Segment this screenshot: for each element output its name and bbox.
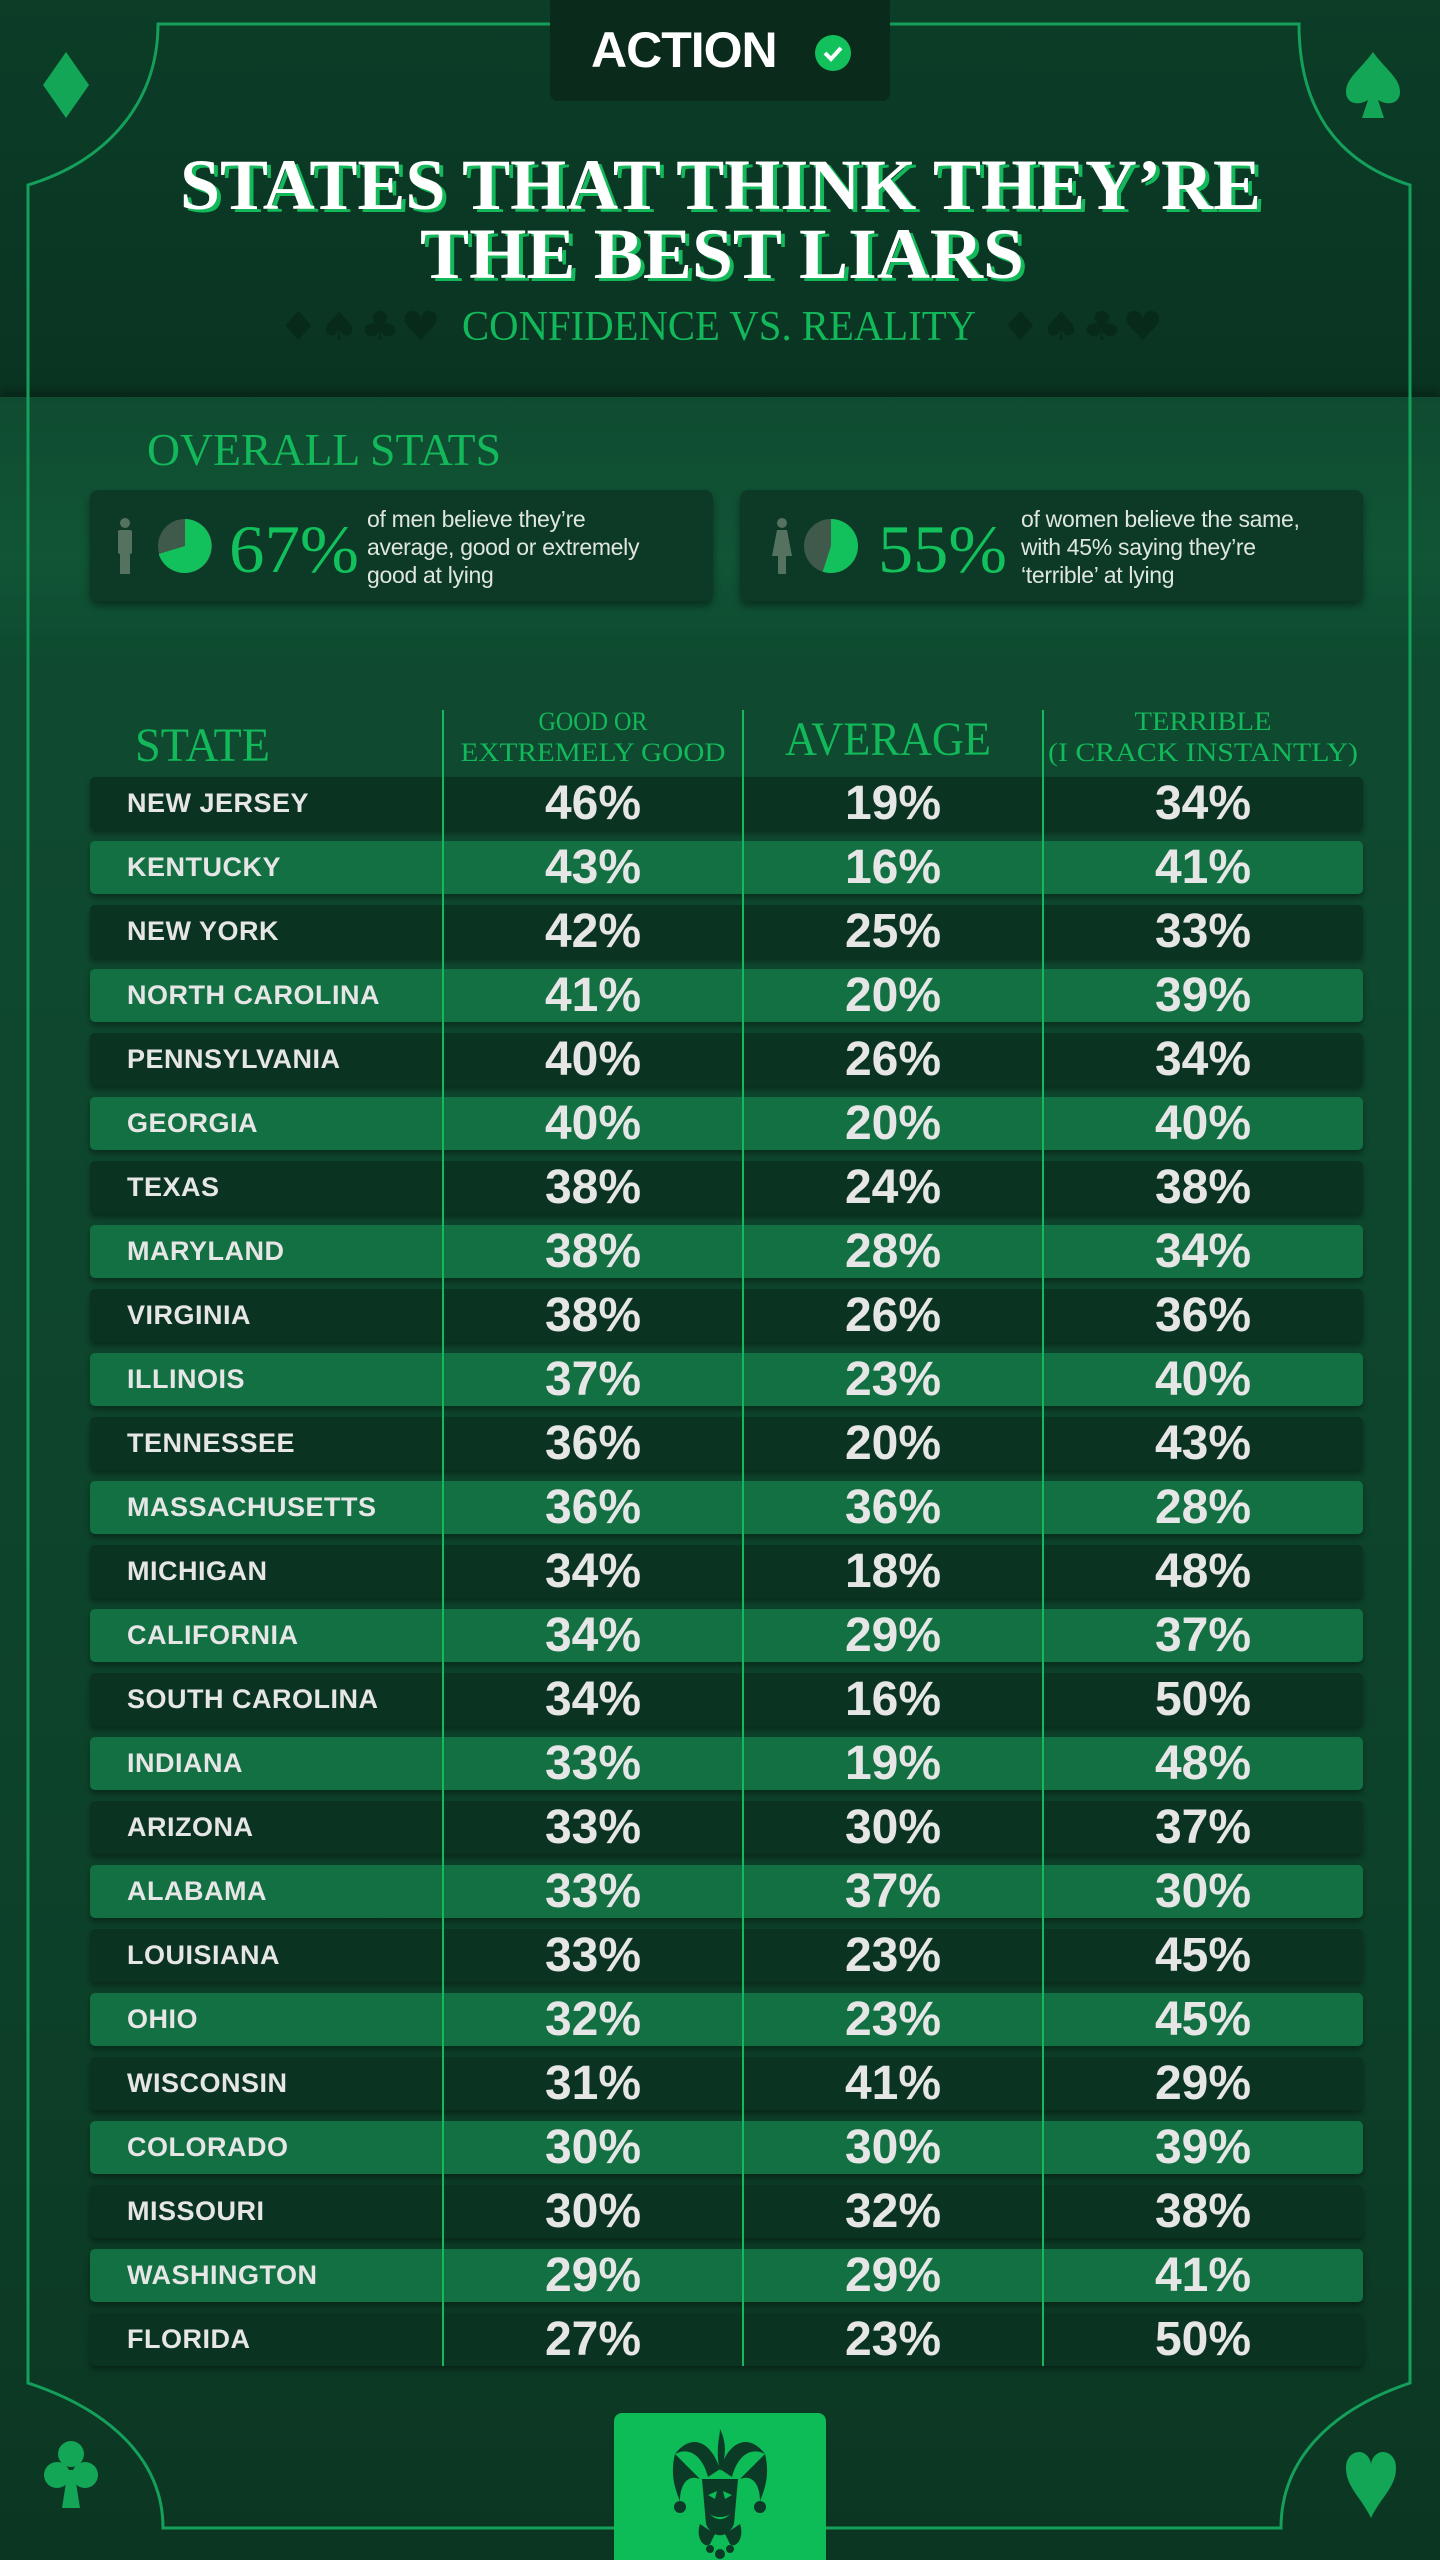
table: 23%: [845, 1993, 941, 2046]
table: SOUTH CAROLINA: [127, 1684, 378, 1714]
table: COLORADO: [127, 2132, 288, 2162]
table: 29%: [845, 2249, 941, 2302]
table: 41%: [1155, 841, 1251, 894]
table: 23%: [845, 1353, 941, 1406]
table: 38%: [545, 1225, 641, 1278]
table: 24%: [845, 1161, 941, 1214]
table: 31%: [545, 2057, 641, 2110]
table: 19%: [845, 1737, 941, 1790]
heading: overall stats: OVERALL STATS: [147, 424, 501, 475]
icon: man: [118, 518, 132, 574]
table: 40%: [545, 1033, 641, 1086]
table: 29%: [1155, 2057, 1251, 2110]
table: 29%: [845, 1609, 941, 1662]
card: men: average, good or extremely: [367, 534, 639, 560]
table: 33%: [545, 1865, 641, 1918]
icon: diamond: [43, 52, 89, 118]
table: 20%: [845, 969, 941, 1022]
card: women: [740, 490, 1363, 601]
table: 16%: [845, 1673, 941, 1726]
table: 34%: [545, 1545, 641, 1598]
table: ILLINOIS: [127, 1364, 245, 1394]
table: 29%: [545, 2249, 641, 2302]
table: 28%: [845, 1225, 941, 1278]
card: men: 67%: [229, 511, 359, 587]
table: 34%: [1155, 1225, 1251, 1278]
icon: spade: [1346, 52, 1400, 118]
table headers: GOOD OR: [538, 707, 648, 736]
table: 40%: [1155, 1353, 1251, 1406]
table: 43%: [1155, 1417, 1251, 1470]
title: STATES THAT THINK THEY’RE: [180, 145, 1261, 225]
table: 50%: [1155, 2313, 1251, 2366]
table: 20%: [845, 1097, 941, 1150]
table: 23%: [845, 1929, 941, 1982]
table: 33%: [545, 1737, 641, 1790]
table: INDIANA: [127, 1748, 243, 1778]
table: 30%: [1155, 1865, 1251, 1918]
icon: jester: [672, 2429, 768, 2559]
table: ARIZONA: [127, 1812, 254, 1842]
table: MASSACHUSETTS: [127, 1492, 377, 1522]
table: 40%: [545, 1097, 641, 1150]
table: TENNESSEE: [127, 1428, 295, 1458]
table headers: (I CRACK INSTANTLY): [1048, 738, 1358, 767]
table: 32%: [845, 2185, 941, 2238]
table: 50%: [1155, 1673, 1251, 1726]
card: men: [90, 490, 713, 601]
table: 38%: [545, 1289, 641, 1342]
table: 43%: [545, 841, 641, 894]
table: 26%: [845, 1033, 941, 1086]
table headers: TERRIBLE: [1134, 707, 1272, 736]
subtitle: ♦♠♣♥: [278, 304, 441, 350]
table headers: EXTREMELY GOOD: [460, 738, 726, 767]
table: FLORIDA: [127, 2324, 250, 2354]
table: 34%: [545, 1673, 641, 1726]
background bands: [0, 0, 1440, 397]
table: NEW YORK: [127, 916, 279, 946]
subtitle: [278, 304, 1163, 350]
table headers: AVERAGE: [785, 713, 991, 766]
icon: club: [44, 2441, 98, 2508]
table: 33%: [545, 1929, 641, 1982]
table: 26%: [845, 1289, 941, 1342]
table: MISSOURI: [127, 2196, 265, 2226]
table: 41%: [545, 969, 641, 1022]
table: 32%: [545, 1993, 641, 2046]
table: 36%: [545, 1481, 641, 1534]
table: ALABAMA: [127, 1876, 267, 1906]
title: [135, 145, 1358, 772]
table: MARYLAND: [127, 1236, 284, 1266]
table: KENTUCKY: [127, 852, 281, 882]
table: 45%: [1155, 1929, 1251, 1982]
table: 28%: [1155, 1481, 1251, 1534]
table: VIRGINIA: [127, 1300, 251, 1330]
table: 36%: [845, 1481, 941, 1534]
table: 34%: [1155, 1033, 1251, 1086]
card: women: ‘terrible’ at lying: [1021, 562, 1174, 588]
table: 37%: [845, 1865, 941, 1918]
subtitle: ♦♠♣♥: [1000, 304, 1163, 350]
table: 39%: [1155, 969, 1251, 1022]
icon: heart: [1346, 2452, 1396, 2518]
subtitle: CONFIDENCE VS. REALITY: [462, 304, 976, 350]
logo: ACTION: ACTION: [591, 22, 777, 78]
table: 40%: [1155, 1097, 1251, 1150]
table: 39%: [1155, 2121, 1251, 2174]
table: 38%: [545, 1161, 641, 1214]
table: 38%: [1155, 1161, 1251, 1214]
table: NORTH CAROLINA: [127, 980, 380, 1010]
table: 19%: [845, 777, 941, 830]
table: 37%: [1155, 1609, 1251, 1662]
table: 36%: [1155, 1289, 1251, 1342]
table: 18%: [845, 1545, 941, 1598]
logo box: [550, 0, 890, 101]
table: 41%: [1155, 2249, 1251, 2302]
pie 67%: [158, 519, 212, 573]
table: 23%: [845, 2313, 941, 2366]
pie 55%: [804, 519, 858, 573]
table: 41%: [845, 2057, 941, 2110]
icon: woman: [772, 518, 792, 574]
table: 34%: [1155, 777, 1251, 830]
table: 37%: [1155, 1801, 1251, 1854]
table: 48%: [1155, 1737, 1251, 1790]
table: 45%: [1155, 1993, 1251, 2046]
table: 48%: [1155, 1545, 1251, 1598]
table: 33%: [545, 1801, 641, 1854]
icon: check circle: [815, 35, 851, 71]
table: 34%: [545, 1609, 641, 1662]
table: CALIFORNIA: [127, 1620, 298, 1650]
table: WASHINGTON: [127, 2260, 318, 2290]
table: GEORGIA: [127, 1108, 258, 1138]
table: 30%: [545, 2121, 641, 2174]
table: 46%: [545, 777, 641, 830]
table: WISCONSIN: [127, 2068, 288, 2098]
table: 27%: [545, 2313, 641, 2366]
table: 20%: [845, 1417, 941, 1470]
table: 33%: [1155, 905, 1251, 958]
title: STATES THAT THINK THEY’RE: [184, 148, 1265, 228]
table headers: STATE: [135, 719, 270, 772]
table: 25%: [845, 905, 941, 958]
title: THE BEST LIARS: [420, 214, 1024, 294]
table: 30%: [545, 2185, 641, 2238]
table headers: [135, 707, 1358, 772]
card: women: of women believe the same,: [1021, 506, 1300, 532]
table: PENNSYLVANIA: [127, 1044, 341, 1074]
table: LOUISIANA: [127, 1940, 280, 1970]
card: women: 55%: [878, 511, 1007, 587]
table: 16%: [845, 841, 941, 894]
card: women: with 45% saying they’re: [1021, 534, 1256, 560]
jester badge: [614, 2413, 826, 2560]
table: 30%: [845, 2121, 941, 2174]
table: 37%: [545, 1353, 641, 1406]
table: 30%: [845, 1801, 941, 1854]
title: THE BEST LIARS: [424, 217, 1028, 297]
table: NEW JERSEY: [127, 788, 309, 818]
table: 36%: [545, 1417, 641, 1470]
card: men: of men believe they’re: [367, 506, 585, 532]
table: 42%: [545, 905, 641, 958]
card: men: good at lying: [367, 562, 494, 588]
table: TEXAS: [127, 1172, 220, 1202]
table: 38%: [1155, 2185, 1251, 2238]
table: OHIO: [127, 2004, 198, 2034]
table: MICHIGAN: [127, 1556, 268, 1586]
